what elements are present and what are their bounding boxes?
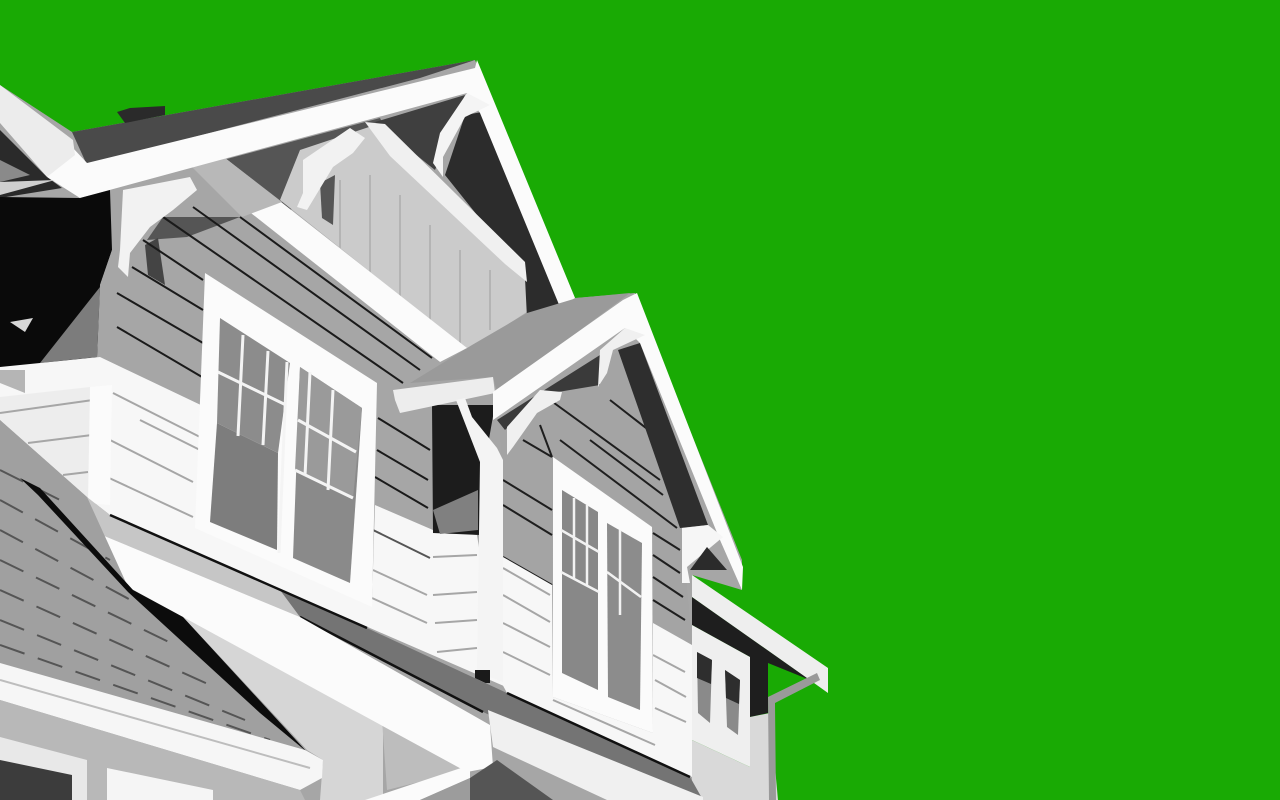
lower left wall xyxy=(0,700,305,800)
right pane upper xyxy=(295,367,362,498)
wing downpipe xyxy=(768,673,820,800)
middle gray wall xyxy=(500,343,692,645)
upper roof shingles xyxy=(72,60,475,165)
large window xyxy=(195,273,377,607)
lower left roof xyxy=(0,420,323,800)
window frame xyxy=(195,273,377,607)
bottom dark area xyxy=(470,760,553,800)
central right gutter xyxy=(488,710,703,800)
central fascia xyxy=(73,523,493,772)
gable dark eave left of king bracket xyxy=(375,95,465,170)
eave tip bracket xyxy=(682,525,723,583)
left eave light soffit xyxy=(0,160,30,182)
dormer shingles xyxy=(410,293,630,392)
middle left pane xyxy=(562,490,598,690)
king bracket xyxy=(433,93,490,177)
gable dark boards xyxy=(223,118,400,210)
middle white wall xyxy=(500,557,692,777)
dormer underside shadow xyxy=(497,355,600,430)
wing wall xyxy=(692,625,750,767)
left pane upper xyxy=(217,318,290,453)
white trim under gable panel xyxy=(365,122,527,282)
dormer downpipe xyxy=(456,398,503,682)
central lower roof xyxy=(40,492,703,800)
white lower wall xyxy=(0,357,520,693)
main diagonal trim xyxy=(190,158,467,362)
middle window xyxy=(553,457,653,733)
fascia line xyxy=(0,680,310,768)
panel board lines xyxy=(340,175,490,345)
window muntins xyxy=(218,335,356,553)
gable dark eave right of king bracket xyxy=(445,112,562,318)
central wall xyxy=(183,617,383,800)
house base silhouette xyxy=(0,60,742,800)
wing panes xyxy=(697,652,712,723)
wing lower wall xyxy=(692,713,778,800)
dark siding line xyxy=(373,530,430,558)
pipe end xyxy=(475,670,490,683)
dormer brackets xyxy=(507,390,562,455)
middle dormer xyxy=(393,293,743,777)
porch wall xyxy=(382,720,467,790)
wing fascia xyxy=(692,575,828,693)
porch beam xyxy=(365,765,470,800)
gray siding wall xyxy=(100,170,440,530)
dormer fascia right xyxy=(493,293,743,590)
dormer eave shadow xyxy=(618,343,708,528)
gable board panel xyxy=(280,125,527,350)
lower left shingles xyxy=(0,420,307,753)
lower left fascia xyxy=(0,663,323,790)
shaded siding triangle xyxy=(40,287,100,363)
siding lines xyxy=(117,207,432,508)
upper gable xyxy=(0,60,575,362)
bracket left xyxy=(118,177,197,277)
roof black edge xyxy=(110,515,690,777)
dormer fascia left xyxy=(393,377,495,413)
middle window frame xyxy=(553,457,653,733)
right pane xyxy=(293,367,362,583)
black ridge xyxy=(20,478,307,752)
white wall siding lines xyxy=(503,568,686,745)
sill shadow xyxy=(0,370,25,393)
bracket middle xyxy=(297,128,365,225)
left eave shadow xyxy=(0,130,62,198)
left pane lower xyxy=(210,423,278,550)
wing soffit dark xyxy=(692,597,810,717)
bracket shadow xyxy=(145,238,165,285)
wall shadow xyxy=(147,217,240,240)
right lower wing xyxy=(692,575,828,800)
light triangle xyxy=(10,318,33,332)
roof vent xyxy=(117,106,165,123)
middle muntins xyxy=(561,498,641,615)
left eave xyxy=(0,85,75,177)
lower siding lines xyxy=(0,393,477,652)
middle right pane xyxy=(607,523,642,710)
dormer siding lines xyxy=(503,400,685,620)
upper fascia xyxy=(47,60,575,307)
lower left window xyxy=(0,737,87,800)
white column xyxy=(88,385,112,505)
dormer recess xyxy=(432,405,495,535)
central dark shingles xyxy=(280,590,703,800)
shingle texture xyxy=(0,470,270,740)
trim shadow xyxy=(190,158,282,217)
central light shingle band xyxy=(40,492,703,800)
left box panel xyxy=(0,387,90,497)
dark recess at left xyxy=(0,190,112,368)
